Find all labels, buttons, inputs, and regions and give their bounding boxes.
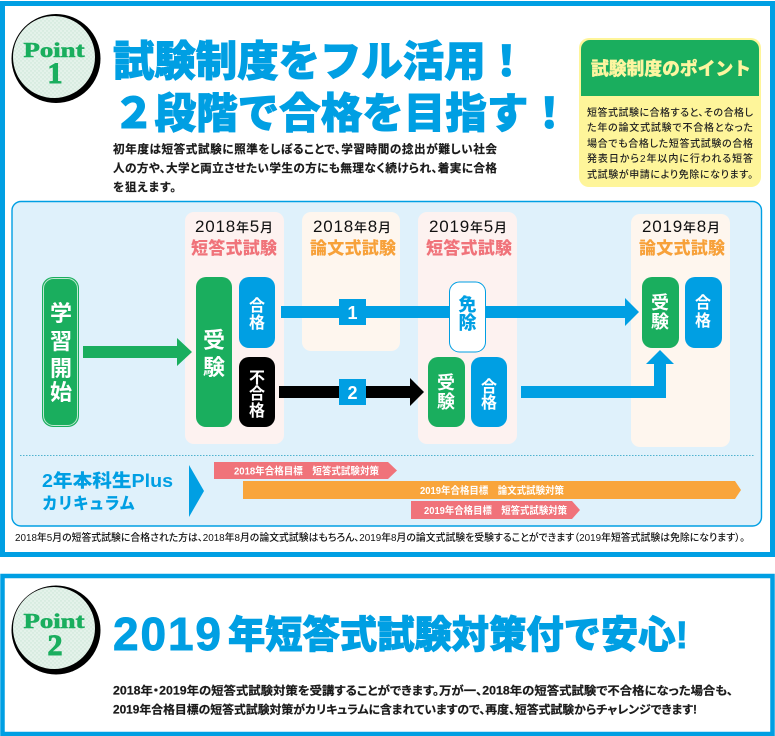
box: exempt: 除 xyxy=(458,313,476,333)
column: May 2018 short-answer exam xyxy=(185,212,284,444)
box: start of study: 学 xyxy=(50,301,72,326)
badge: point 2: 2 xyxy=(48,629,62,662)
bar: 2019 essay target: 2019年合格目標 論文式試験対策 xyxy=(420,484,564,497)
caption: timeline note: 2018年5月の短答式試験に合格された方は、2018年8月の論文式試験はもちろん、2019年8月の論文式試験を受験することができます（2019年短答式試験は免除になります）。 xyxy=(15,531,745,544)
arrow: route 1 xyxy=(281,298,639,326)
box: take exam August 2019: 受 xyxy=(651,292,669,313)
title: point 1 xyxy=(113,38,570,137)
box: failed May 2018: 格 xyxy=(249,401,265,420)
box: failed May 2018: 不 xyxy=(249,370,265,387)
title: point 1: 試験制度をフル活用！ xyxy=(113,38,527,85)
heading: curriculum: カリキュラム xyxy=(42,494,135,513)
box: take exam May 2019 xyxy=(428,357,465,427)
arrow: curriculum pointer xyxy=(189,465,204,517)
text block: point 2 description xyxy=(113,684,733,716)
box: start of study xyxy=(42,277,79,427)
badge: point 2: Point xyxy=(24,609,84,633)
label: route 1: 1 xyxy=(347,303,358,323)
column: May 2019 short-answer exam: 2019年5月 xyxy=(429,217,507,236)
label: route 1 xyxy=(339,299,366,325)
callout: exam system points: た年の論文式試験で不合格となった xyxy=(587,121,753,134)
box: passed May 2019: 合 xyxy=(481,378,497,396)
callout: exam system points: 発表日から2年以内に行われる短答 xyxy=(587,152,753,165)
text block: point 1 introduction xyxy=(113,142,497,194)
box: failed May 2018 xyxy=(239,357,275,427)
column: May 2019 short-answer exam: 短答式試験 xyxy=(426,238,512,258)
column: August 2019 essay exam: 論文式試験 xyxy=(639,238,725,258)
arrow: elbow to August 2019 xyxy=(521,350,674,398)
heading: curriculum xyxy=(42,470,173,513)
box: start of study: 開 xyxy=(50,356,72,381)
bar: 2019 short-answer target xyxy=(411,501,580,519)
arrow: route 2 xyxy=(279,378,424,406)
column: August 2019 essay exam xyxy=(631,214,730,447)
callout: exam system points xyxy=(579,38,761,187)
box: passed August 2019: 合 xyxy=(695,294,711,312)
panel frame: point 2 xyxy=(2,576,772,734)
title: point 2: 2019 xyxy=(113,608,221,660)
callout: exam system points: 試験制度のポイント xyxy=(591,58,751,79)
heading: curriculum: 2年本科生Plus xyxy=(42,470,173,491)
column: May 2018 short-answer exam: 2018年5月 xyxy=(195,217,273,236)
text block: point 1 introduction: 初年度は短答式試験に照準をしぼることで、学習時間の捻出が難しい社会 xyxy=(113,142,497,156)
column: August 2018 essay exam xyxy=(302,212,400,351)
box: start of study: 習 xyxy=(50,329,72,354)
label: route 2 xyxy=(339,379,366,405)
box: passed May 2019: 格 xyxy=(481,393,497,412)
badge: point 1: Point xyxy=(24,38,84,62)
callout: exam system points: 短答式試験に合格すると、その合格し xyxy=(587,106,754,119)
box: exempt xyxy=(450,282,486,352)
callout: exam system points: 場合でも合格した短答式試験の合格 xyxy=(587,137,753,150)
box: start of study: 始 xyxy=(50,380,72,405)
text block: point 1 introduction: を狙えます。 xyxy=(113,181,176,194)
callout: exam system points: 式試験が申請により免除になります。 xyxy=(587,168,753,181)
title: point 1: ２段階で合格を目指す！ xyxy=(113,90,570,137)
column: May 2019 short-answer exam xyxy=(418,212,517,444)
text block: point 1 introduction: 人の方や、大学と両立させたい学生の方にも無理なく続けられ、着実に合格 xyxy=(113,161,497,175)
box: passed August 2019: 格 xyxy=(695,311,711,330)
panel: point 2 xyxy=(2,576,772,734)
bar: 2019 essay target xyxy=(243,481,741,499)
box: passed May 2019 xyxy=(471,357,507,427)
box: failed May 2018: 合 xyxy=(249,385,265,403)
text block: point 2 description: 2018年・2019年の短答式試験対策を受講することができます。万が一、2018年の短答式試験で不合格になった場合も、 xyxy=(113,684,733,698)
title: point 2: 年短答式試験対策付で安心! xyxy=(228,615,688,657)
column: May 2018 short-answer exam: 短答式試験 xyxy=(191,238,277,258)
badge: point 2 xyxy=(12,586,100,674)
column: August 2019 essay exam: 2019年8月 xyxy=(642,217,720,236)
column: August 2018 essay exam: 論文式試験 xyxy=(310,238,396,258)
bar: 2019 short-answer target: 2019年合格目標 短答式試験対策 xyxy=(424,504,567,517)
text block: point 2 description: 2019年合格目標の短答式試験対策がカリキュラムに含まれていますので、再度、短答式試験からチャレンジできます! xyxy=(113,702,697,716)
box: exempt: 免 xyxy=(458,294,476,315)
badge: point 1: 1 xyxy=(48,57,62,90)
title: point 2 xyxy=(113,608,688,660)
box: passed May 2018: 合 xyxy=(249,297,265,315)
box: take exam May 2018: 受 xyxy=(203,328,225,353)
box: take exam May 2019: 験 xyxy=(437,392,455,412)
label: route 2: 2 xyxy=(347,383,358,403)
panel: exam timeline diagram xyxy=(12,202,762,526)
box: take exam August 2019: 験 xyxy=(651,312,669,332)
bar: 2018 short-answer target xyxy=(214,462,397,479)
badge: point 1 xyxy=(12,14,100,103)
panel: point 1 xyxy=(2,4,772,554)
box: take exam May 2018: 験 xyxy=(203,355,225,380)
bar: 2018 short-answer target: 2018年合格目標 短答式試験対策 xyxy=(234,464,379,478)
box: passed August 2019 xyxy=(685,277,722,348)
column: August 2018 essay exam: 2018年8月 xyxy=(313,217,391,236)
box: take exam May 2018 xyxy=(196,277,232,427)
box: passed May 2018: 格 xyxy=(249,313,265,332)
panel frame: point 1 xyxy=(2,4,772,554)
box: take exam August 2019 xyxy=(642,277,679,348)
box: passed May 2018 xyxy=(239,277,275,348)
arrow: start to exam xyxy=(83,338,192,366)
box: take exam May 2019: 受 xyxy=(437,372,455,393)
